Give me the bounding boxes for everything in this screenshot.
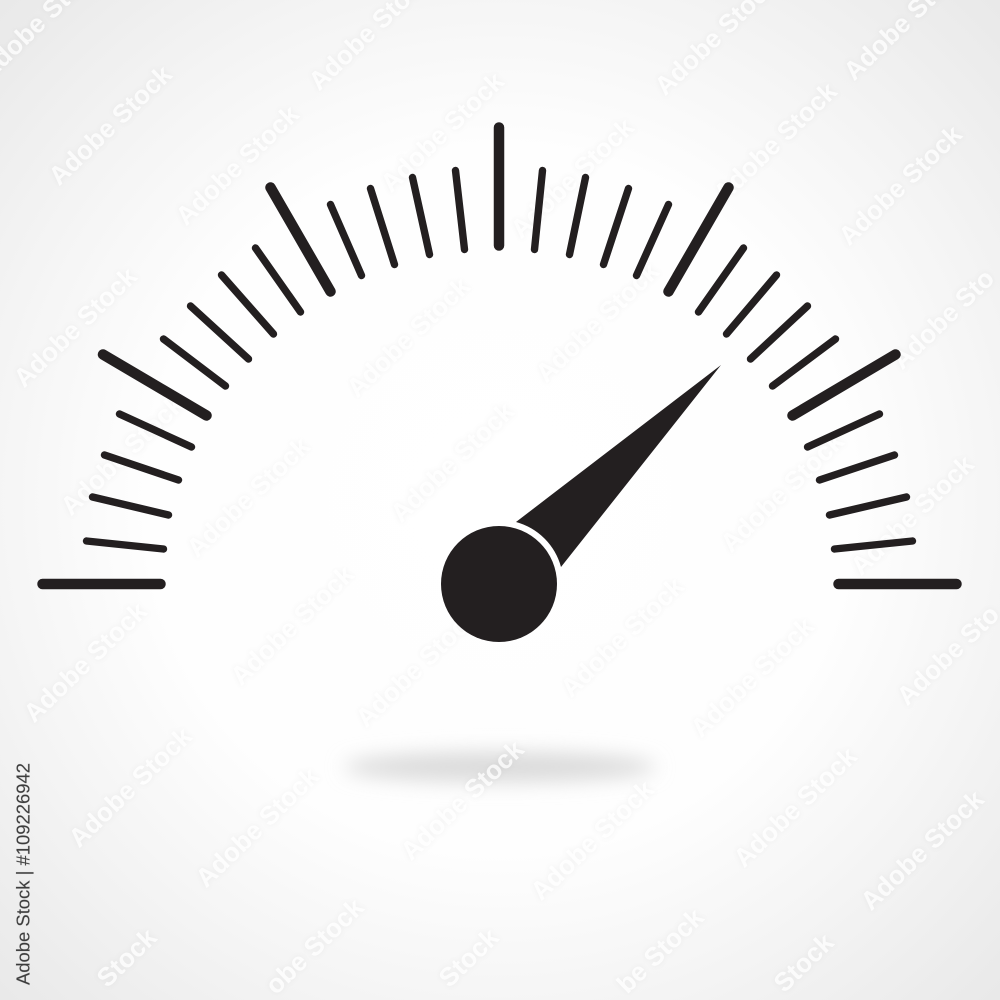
watermark pattern: obe Stock: [259, 892, 370, 1000]
needle hub: [441, 526, 557, 642]
watermark pattern: Adobe Stock: [180, 431, 316, 563]
watermark pattern: Adobe Stock: [394, 734, 530, 866]
watermark pattern: be Stock: [611, 902, 710, 999]
watermark pattern: Adobe Stock: [524, 774, 660, 906]
watermark pattern: Adobe Sto: [886, 263, 1000, 375]
watermark pattern: Adobe Stock: [340, 271, 476, 403]
watermark pattern: Adobe Stock: [684, 611, 820, 743]
watermark pattern: Adobe Stock: [62, 721, 198, 853]
watermark pattern: Adobe Stock: [832, 119, 968, 251]
watermark pattern: Adobe Stock: [169, 99, 305, 231]
watermark pattern: Adobe Stock: [54, 389, 190, 521]
watermark pattern: Adobe Stock: [384, 396, 520, 528]
watermark pattern: Stock: [91, 922, 163, 993]
watermark pattern: Adobe Stock: [504, 112, 640, 244]
watermark pattern: Adobe Stock: [727, 741, 863, 873]
gauge scale ticks: [42, 128, 956, 584]
watermark pattern: Adobe Stock: [374, 66, 510, 198]
watermark pattern: Adobe Stock: [17, 596, 153, 728]
watermark pattern: Stock: [433, 922, 505, 993]
stock id label: Adobe Stock | #109226942: [12, 763, 34, 985]
watermark pattern: Adobe Stock: [714, 426, 850, 558]
watermark pattern: Adobe Stock: [349, 601, 485, 733]
watermark pattern: Adobe Stock: [42, 59, 178, 191]
major ticks: [42, 128, 956, 584]
gauge drop shadow: [344, 752, 656, 782]
watermark pattern: Adobe Stock: [189, 761, 325, 893]
watermark pattern: Stock: [768, 927, 840, 998]
needle: [516, 365, 721, 567]
watermark pattern: Adobe Stock: [7, 261, 143, 393]
watermark pattern: Adobe Stock: [707, 76, 843, 208]
watermark pattern: Adobe Stock: [529, 256, 665, 388]
watermark pattern: Adobe Stock: [844, 449, 980, 581]
minor ticks: [86, 170, 912, 549]
watermark pattern: Adobe Stock: [224, 559, 360, 691]
watermark pattern: Adobe Stock: [854, 784, 990, 916]
watermark pattern: Adobe Stock: [554, 571, 690, 703]
